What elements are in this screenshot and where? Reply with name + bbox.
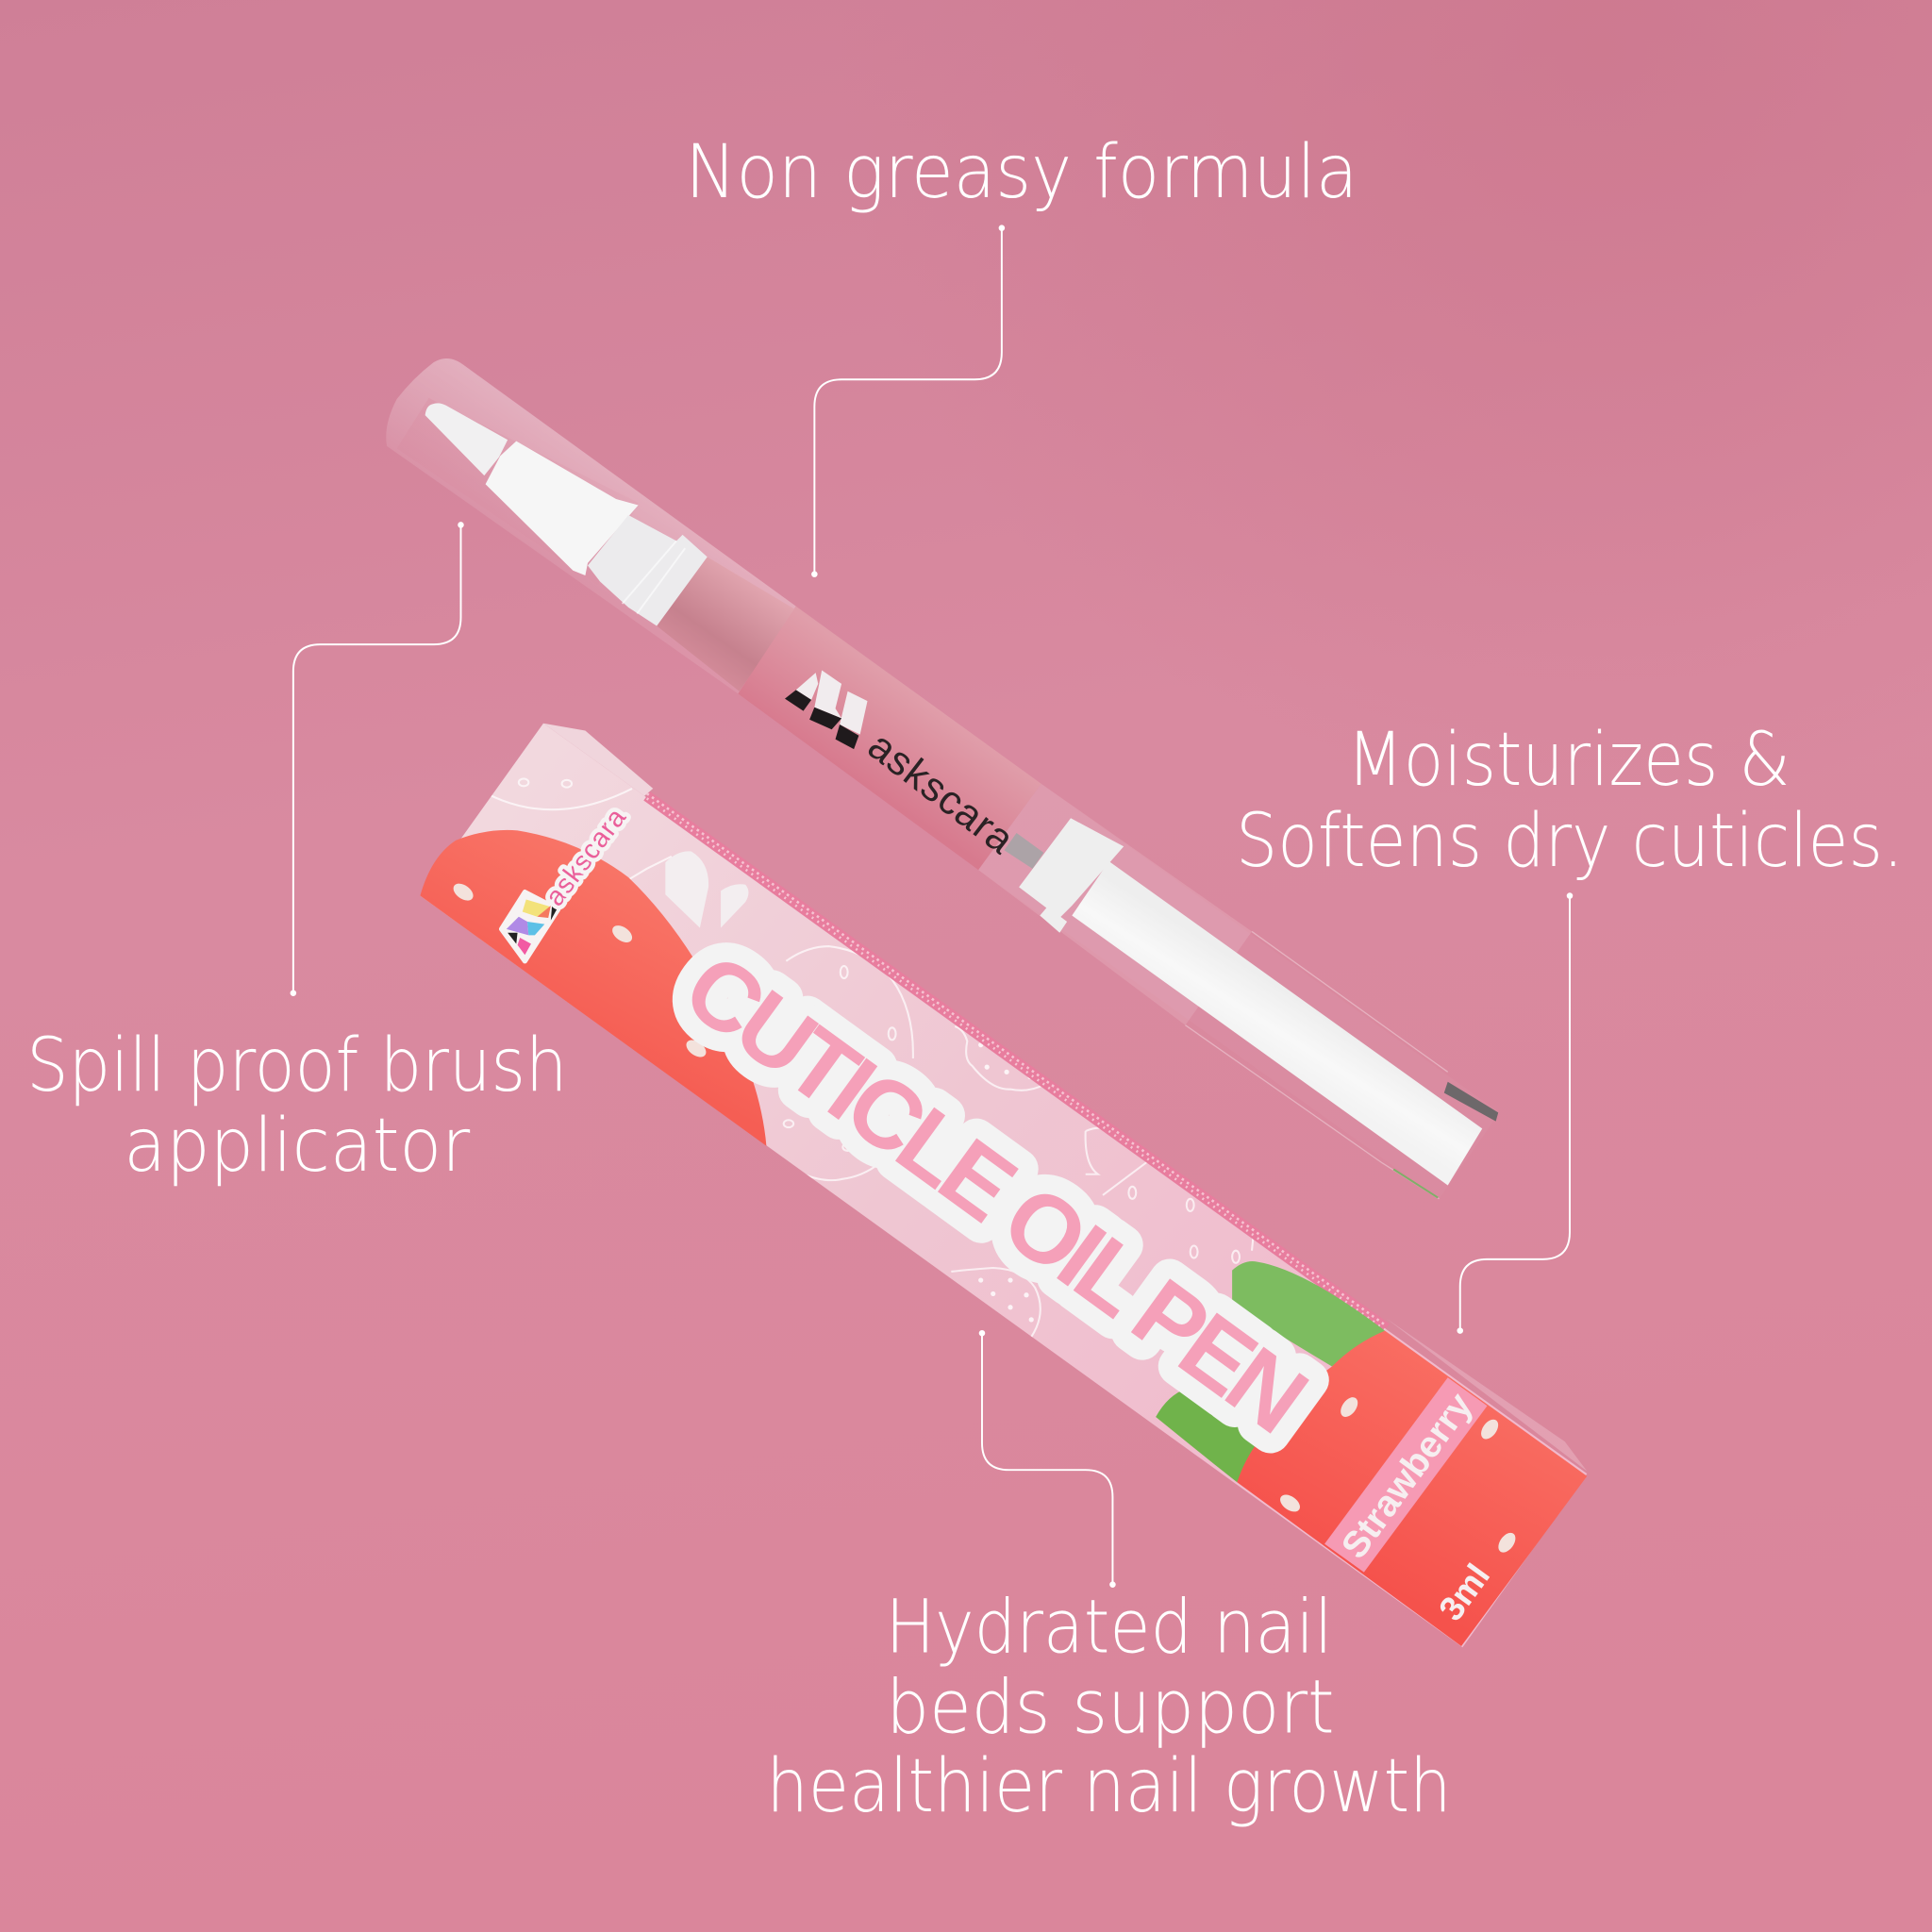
strawberry seeds dots <box>978 1042 1034 1322</box>
volume text: 3ml <box>1431 1557 1497 1627</box>
pen body <box>738 607 1041 870</box>
callout: spill proof <box>26 522 567 1189</box>
pen inner tube <box>657 557 796 691</box>
pen mid section <box>1004 818 1124 933</box>
heading: moisturizes: Moisturizes & <box>1347 717 1790 803</box>
green leaf lower <box>1156 1389 1258 1482</box>
connector line <box>1457 892 1573 1334</box>
connector line <box>979 1330 1116 1588</box>
heading: spill proof: Spill proof brush <box>26 1023 567 1108</box>
white leaves <box>665 851 748 928</box>
decorative strawberry outlines <box>487 778 1253 1337</box>
red strawberry right <box>1237 1331 1587 1646</box>
seeds <box>450 880 1519 1556</box>
connector line <box>811 225 1005 577</box>
pen logo <box>785 671 1022 862</box>
callout: moisturizes <box>1236 717 1904 1334</box>
callout: non greasy formula <box>685 129 1357 577</box>
heading: hydrated nail beds: healthier nail growth <box>766 1743 1452 1829</box>
box brand text: askscara <box>540 803 632 911</box>
pen barrel <box>1072 861 1482 1185</box>
callout: hydrated nail beds <box>766 1330 1452 1829</box>
product: box <box>420 724 1587 1647</box>
heading: hydrated nail beds: beds support <box>886 1664 1335 1750</box>
product title: CUTICLE OIL PEN <box>665 932 1322 1451</box>
box textured stripe <box>647 793 1386 1331</box>
box logo sticker <box>502 803 632 961</box>
heading: hydrated nail beds: Hydrated nail <box>885 1585 1333 1671</box>
box top sliver right <box>1386 1319 1587 1472</box>
pen cap <box>386 358 796 693</box>
box face <box>420 724 1587 1647</box>
product: cuticle oil pen <box>386 358 1500 1199</box>
flavor band <box>1324 1377 1487 1573</box>
pen brush tip <box>425 403 708 626</box>
pen brand text: askscara <box>859 724 1022 862</box>
green leaf upper <box>1232 1261 1385 1366</box>
heading: non greasy formula: Non greasy formula <box>685 129 1357 215</box>
pen end detail <box>1393 1082 1498 1198</box>
pen lower clear tube <box>978 784 1500 1199</box>
flavor text: Strawberry <box>1334 1386 1481 1566</box>
box top sliver <box>543 724 653 796</box>
connector line <box>291 522 464 996</box>
heading: spill proof: applicator <box>124 1103 471 1189</box>
red strawberry left <box>420 830 766 1146</box>
